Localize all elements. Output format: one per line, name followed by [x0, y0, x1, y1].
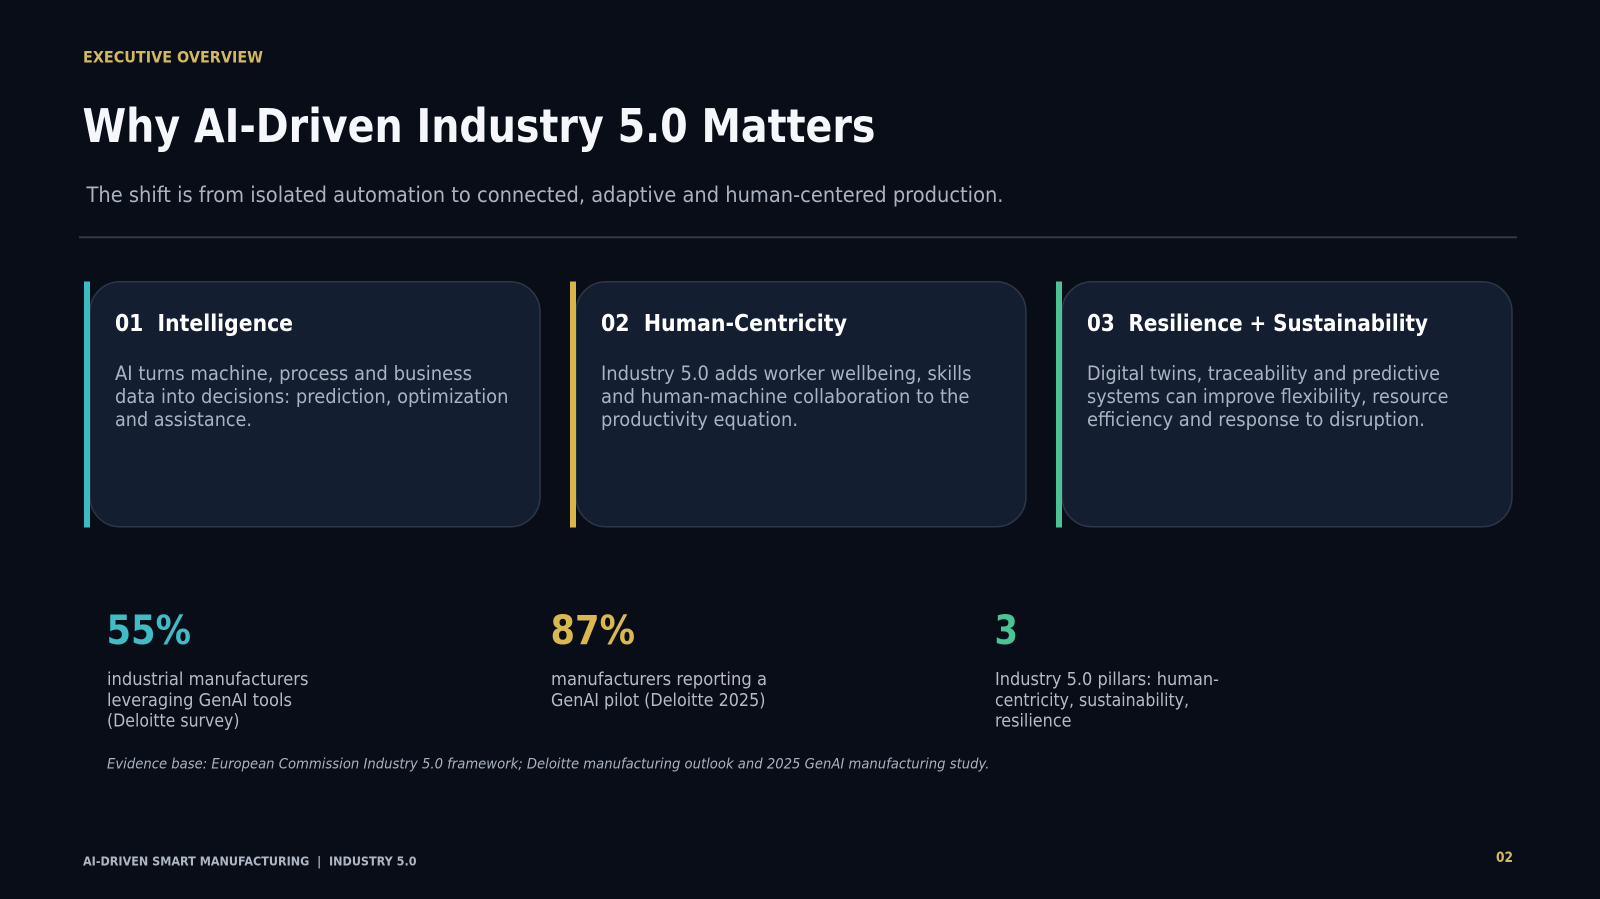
stat label: centricity, sustainability, — [995, 691, 1189, 711]
evidence note: Evidence base: European Commission Industry 5.0 framework; Deloitte manufacturing outlook and 2025 GenAI manufacturing study. — [107, 756, 990, 772]
card heading: 02 Human-Centricity — [601, 311, 847, 337]
stat: 87% — [550, 606, 767, 711]
panel: 03 Resilience + Sustainability — [1056, 282, 1512, 528]
stat value: 87% — [550, 606, 635, 654]
stat label: resilience — [995, 712, 1072, 732]
stat label: leveraging GenAI tools — [107, 691, 292, 711]
card background — [576, 282, 1026, 527]
card body text: and human-machine collaboration to the — [601, 385, 970, 408]
stat label: GenAI pilot (Deloitte 2025) — [551, 691, 766, 711]
card background — [90, 282, 540, 527]
card background — [1062, 282, 1512, 527]
stat label — [995, 670, 1219, 732]
accent bar — [84, 282, 90, 528]
card body text: AI turns machine, process and business — [115, 362, 472, 385]
stat: 55% — [106, 606, 308, 732]
stat value: 55% — [106, 606, 191, 654]
stat value: 3 — [994, 606, 1018, 654]
stat label: industrial manufacturers — [107, 670, 308, 690]
card heading: 01 Intelligence — [115, 311, 293, 337]
card heading: 03 Resilience + Sustainability — [1087, 311, 1428, 337]
card body text: Industry 5.0 adds worker wellbeing, skills — [601, 362, 972, 385]
panel: 01 Intelligence — [84, 282, 540, 528]
card body text — [601, 362, 972, 431]
card body text: Digital twins, traceability and predictive — [1087, 362, 1440, 385]
card body text — [1087, 362, 1448, 431]
footer label: AI-DRIVEN SMART MANUFACTURING | INDUSTRY 5.0 — [83, 854, 417, 868]
title: Why AI-Driven Industry 5.0 Matters — [82, 99, 876, 153]
subtitle: The shift is from isolated automation to connected, adaptive and human-centered production. — [86, 183, 1004, 207]
panel: 02 Human-Centricity — [570, 282, 1026, 528]
stat: 3 pillars — [994, 606, 1219, 732]
card body text: efficiency and response to disruption. — [1087, 408, 1425, 431]
page number: 02 — [1496, 850, 1513, 866]
stat label: manufacturers reporting a — [551, 670, 767, 690]
stat label — [551, 670, 767, 711]
accent bar — [570, 282, 576, 528]
card body text: productivity equation. — [601, 408, 798, 431]
card body text: and assistance. — [115, 408, 252, 431]
accent bar — [1056, 282, 1062, 528]
card body text — [115, 362, 508, 431]
stat label — [107, 670, 308, 732]
stat label: Industry 5.0 pillars: human- — [995, 670, 1219, 690]
card body text: data into decisions: prediction, optimization — [115, 385, 508, 408]
eyebrow label: EXECUTIVE OVERVIEW — [83, 48, 263, 67]
card body text: systems can improve flexibility, resource — [1087, 385, 1448, 408]
stat label: (Deloitte survey) — [107, 712, 240, 732]
